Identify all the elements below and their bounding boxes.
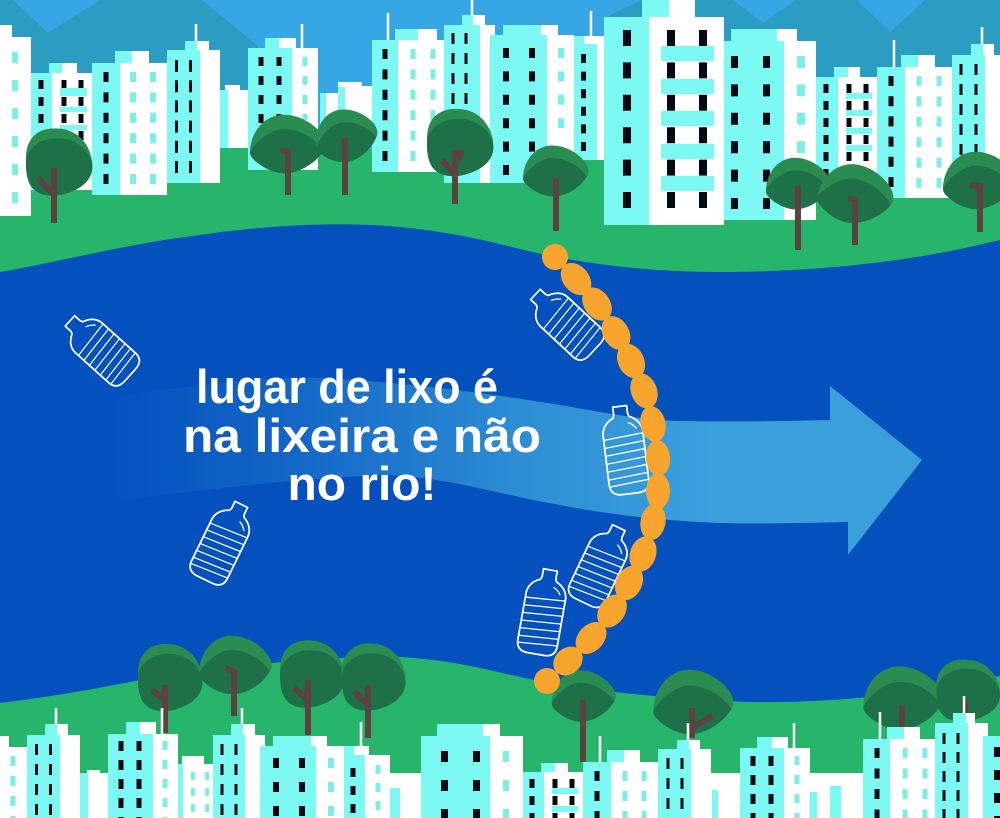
building top 7	[320, 82, 372, 136]
building top 10	[490, 25, 574, 183]
bottom tree 3	[280, 640, 344, 735]
bottle 1	[57, 306, 143, 390]
top river bank	[0, 148, 1000, 290]
river	[0, 224, 1000, 710]
floating boom	[534, 244, 672, 694]
building top 12 large	[604, 0, 724, 225]
tree 3	[312, 105, 381, 195]
tree 8	[943, 152, 1000, 232]
building bottom 8	[344, 722, 390, 818]
message text	[183, 360, 541, 510]
building bottom 3	[80, 770, 108, 818]
building bottom 1	[0, 736, 27, 818]
tree 6	[766, 158, 831, 250]
bottom tree 5	[552, 670, 616, 762]
building bottom 2	[27, 708, 80, 818]
tree 7	[814, 160, 898, 245]
building top 9	[444, 0, 495, 183]
building bottom 14	[711, 773, 740, 818]
building top 14	[816, 67, 877, 187]
bottle 3	[600, 404, 650, 496]
building top 13	[724, 29, 816, 220]
building top 3	[92, 51, 167, 195]
tree 4	[427, 109, 493, 204]
bottom river bank	[0, 657, 1000, 818]
building top 4	[167, 24, 220, 183]
bottom trees	[138, 636, 1000, 762]
building bottom 10	[421, 724, 523, 818]
bottle 4	[565, 519, 637, 611]
mountains	[0, 0, 1000, 120]
bottom tree 8	[936, 660, 1000, 725]
building bottom 13	[658, 723, 711, 818]
building bottom 18	[935, 696, 988, 818]
bottom tree 7	[863, 666, 943, 730]
building bottom 19	[980, 736, 1000, 818]
bottom tree 1	[138, 644, 202, 733]
bottom skyline	[0, 696, 1000, 818]
building bottom 6	[213, 708, 265, 818]
building top 11	[574, 11, 604, 160]
bottles	[57, 280, 650, 658]
message text: na lixeira e não	[183, 409, 541, 462]
bottle 6	[187, 496, 259, 588]
bottle 2	[522, 280, 608, 364]
top trees	[26, 105, 1000, 250]
building top 8	[372, 13, 448, 172]
building bottom 17	[863, 712, 935, 818]
message text: no rio!	[288, 457, 436, 510]
sky	[0, 0, 1000, 300]
tree 5	[523, 146, 589, 231]
building bottom 7	[260, 736, 344, 818]
building top 2	[31, 63, 92, 190]
building top 1	[0, 25, 31, 216]
bottle 5	[516, 566, 570, 658]
tree 2	[250, 115, 326, 195]
bottom tree 4	[342, 643, 405, 738]
bottom tree 6	[653, 670, 733, 738]
top skyline	[0, 0, 1000, 225]
building top 16	[952, 27, 1000, 185]
building top 6	[248, 24, 318, 170]
arrow: river flow	[110, 377, 922, 555]
building bottom 5	[178, 756, 213, 818]
building top 5	[220, 85, 248, 148]
bottom tree 2	[199, 636, 272, 716]
building bottom 11	[523, 763, 583, 818]
building bottom 12	[583, 736, 658, 818]
tree 1	[26, 128, 92, 223]
building top 15	[877, 40, 952, 198]
building bottom 15	[740, 723, 810, 818]
building bottom 4	[108, 708, 178, 818]
building bottom 16	[810, 773, 863, 818]
building bottom 9	[390, 773, 421, 818]
message text: lugar de lixo é	[196, 360, 498, 413]
